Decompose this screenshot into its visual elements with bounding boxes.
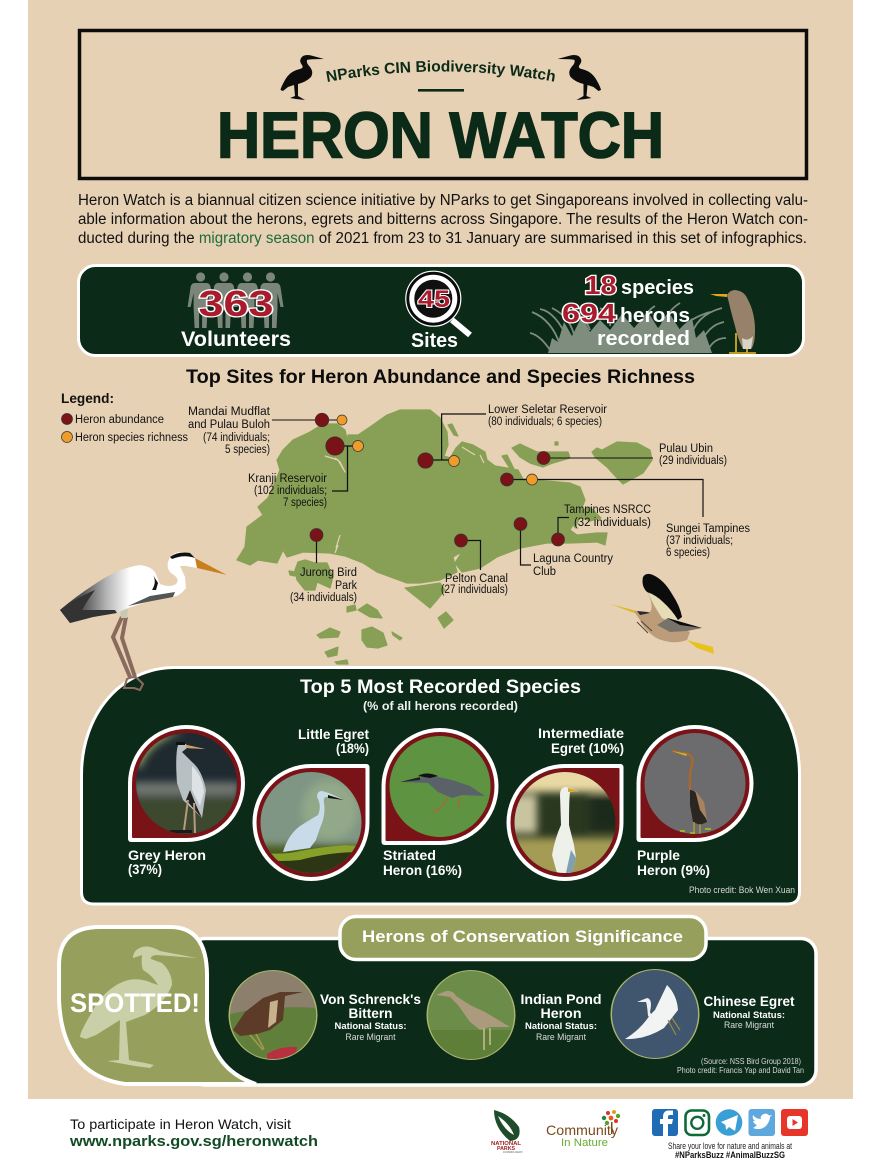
footer call to action: To participate in Heron Watch, visit [70, 1116, 291, 1132]
map site: Laguna Country Club: Laguna Country [533, 553, 613, 565]
footer call to action [69, 1116, 318, 1150]
logo: National Parks [491, 1110, 523, 1154]
label: little egret: (18%) [336, 741, 369, 756]
volunteers number: 363 [198, 283, 274, 324]
icon: youtube [781, 1109, 808, 1136]
label: grey heron: Grey Heron [128, 848, 206, 863]
herons recorded label: herons [620, 305, 690, 327]
map site: Pulau Ubin [537, 443, 727, 467]
intro text: able information about the herons, egrets and bitterns across Singapore. The results of the Heron Watch con- [78, 211, 808, 228]
island: Jurong [295, 560, 333, 590]
photo: striated heron [382, 728, 498, 845]
label: Chinese egret: Chinese Egret [704, 993, 795, 1009]
island: Sentosa area [405, 583, 445, 608]
map site: Mandai Mudflat and Pulau Buloh: 5 species) [225, 444, 270, 456]
map site: Kranji Reservoir [248, 437, 364, 509]
map site: Mandai Mudflat and Pulau Buloh: Mandai Mudflat [188, 406, 271, 418]
label: Indian pond heron: National Status: [525, 1021, 597, 1032]
label: striated heron: Striated [383, 848, 436, 863]
title box [78, 28, 808, 180]
map of Singapore [237, 410, 652, 664]
label: Indian pond heron: Heron [540, 1005, 582, 1021]
panel: stats band [78, 266, 804, 356]
label: Von Schrenck's bittern: Rare Migrant [346, 1032, 396, 1043]
label: Von Schrenck's bittern: Bittern [348, 1005, 392, 1021]
herons recorded label [597, 305, 690, 350]
map site: Lower Seletar Reservoir: Lower Seletar Reservoir [488, 404, 607, 416]
photo: little egret [252, 764, 370, 881]
social caption: #NParksBuzz #AnimalBuzzSG [675, 1150, 785, 1160]
map site: Jurong Bird Park: (34 individuals) [290, 592, 357, 604]
herons number: 694 [562, 298, 617, 328]
map site: Sungei Tampines: Sungei Tampines [666, 523, 750, 535]
panel subheading: (% of all herons recorded) [363, 699, 518, 713]
map site: Kranji Reservoir: Kranji Reservoir [248, 473, 327, 485]
photo: Indian pond heron [426, 970, 516, 1060]
panel heading: Top 5 Most Recorded Species [300, 677, 581, 698]
logo: Community in Nature [546, 1110, 620, 1149]
footer call to action: www.nparks.gov.sg/heronwatch [69, 1133, 318, 1150]
icon: instagram [686, 1110, 709, 1135]
map site: Tampines NSRCC: Tampines NSRCC [564, 504, 651, 516]
island: Pulau Ubin [512, 444, 570, 467]
map site: Kranji Reservoir: 7 species) [283, 497, 327, 509]
logo: Community in Nature: In Nature [561, 1137, 608, 1149]
label: Chinese egret [704, 993, 795, 1031]
label: striated heron [383, 848, 462, 878]
grass illustration [530, 303, 726, 353]
intro text: Heron Watch is a biannual citizen science initiative by NParks to get Singaporeans involved in collecting valu- [78, 192, 808, 209]
map site: Jurong Bird Park [290, 528, 357, 604]
herons recorded label: recorded [597, 328, 690, 350]
illustration: grey heron [60, 552, 227, 690]
curved subtitle: NParks CIN Biodiversity Watch [326, 60, 555, 82]
map site: Mandai Mudflat and Pulau Buloh [188, 406, 347, 456]
panel: top 5 species [82, 668, 800, 904]
legend: Legend: [61, 391, 114, 406]
species label: species [621, 277, 694, 299]
spotted text: SPOTTED! [70, 988, 200, 1018]
icon: magnifier [406, 271, 470, 335]
map heading: Top Sites for Heron Abundance and Species Richness [186, 367, 695, 388]
photo: grey heron [128, 725, 245, 842]
map site: Lower Seletar Reservoir [418, 404, 607, 468]
photo: Von Schrenck's bittern [228, 970, 320, 1062]
map site: Sungei Tampines: (37 individuals; [666, 535, 733, 547]
label: Chinese egret: National Status: [713, 1010, 785, 1021]
logo: National Parks: NATIONAL [491, 1141, 522, 1147]
label: grey heron: (37%) [128, 862, 162, 877]
label: Von Schrenck's bittern [320, 991, 421, 1043]
photo credit: Photo credit: Bok Wen Xuan [689, 885, 795, 895]
icon: twitter [748, 1109, 775, 1136]
map site: Pulau Ubin: Pulau Ubin [659, 443, 713, 455]
icon: left heron silhouette [280, 55, 324, 100]
label: Von Schrenck's bittern: Von Schrenck's [320, 991, 421, 1007]
main title: HERON WATCH [217, 98, 664, 172]
photo: Chinese egret [610, 969, 700, 1059]
label: intermediate egret: Egret (10%) [551, 741, 624, 756]
map site: Sungei Tampines: 6 species) [666, 547, 710, 559]
map site: Pelton Canal: (27 individuals) [441, 584, 508, 596]
island: Pulau Tekong [592, 442, 652, 484]
pill heading [340, 916, 706, 960]
map site: Pelton Canal: Pelton Canal [445, 573, 508, 585]
icon: right heron silhouette [558, 55, 601, 100]
photo: purple heron [636, 725, 754, 842]
icon: heron silhouette [80, 946, 197, 1068]
label: striated heron: Heron (16%) [383, 863, 462, 878]
volunteers label: Volunteers [181, 328, 291, 351]
photo: intermediate egret [505, 760, 630, 881]
southern islands [317, 424, 601, 664]
badge: spotted [59, 927, 256, 1084]
icon: volunteers group [188, 272, 284, 328]
map site: Mandai Mudflat and Pulau Buloh: (74 individuals; [203, 432, 270, 444]
label: Indian pond heron: Indian Pond [520, 991, 602, 1007]
panel: conservation significance [190, 938, 816, 1085]
map site: Jurong Bird Park: Jurong Bird [300, 567, 357, 579]
label: grey heron [128, 848, 206, 877]
label: purple heron: Purple [637, 848, 680, 863]
map site: Laguna Country Club: Club [533, 566, 556, 578]
sites label: Sites [411, 330, 458, 352]
species number: 18 [584, 270, 616, 300]
intro text: ducted during the migratory season of 2021 from 23 to 31 January are summarised in this set of infographics. [78, 230, 807, 247]
intro text [78, 192, 808, 247]
label: little egret: Little Egret [298, 727, 369, 742]
source and credit [677, 1056, 804, 1075]
logo: National Parks: PARKS [497, 1146, 515, 1152]
social caption: Share your love for nature and animals at [668, 1141, 792, 1151]
social caption [668, 1141, 792, 1160]
legend: Heron species richness [75, 432, 188, 444]
map site: Jurong Bird Park: Park [335, 580, 357, 592]
label: Chinese egret: Rare Migrant [724, 1020, 774, 1031]
logo: National Parks: AN NPARKS AGENCY [503, 1150, 523, 1154]
illustration: flying bittern [610, 574, 714, 654]
logo: Community in Nature: Community [546, 1122, 618, 1138]
map site: Mandai Mudflat and Pulau Buloh: and Pulau Buloh [188, 419, 270, 431]
map site: Pulau Ubin: (29 individuals) [659, 455, 727, 467]
label: intermediate egret [538, 726, 625, 756]
label: Von Schrenck's bittern: National Status: [334, 1021, 406, 1032]
sites number: 45 [418, 286, 450, 313]
icon: facebook [652, 1109, 678, 1136]
label: Indian pond heron [520, 991, 602, 1043]
pill heading: Herons of Conservation Significance [362, 927, 683, 946]
map site: Kranji Reservoir: (102 individuals; [254, 485, 327, 497]
map site: Sungei Tampines [500, 473, 750, 559]
icon: pond heron [710, 290, 756, 353]
map site: Tampines NSRCC [552, 504, 651, 546]
legend [61, 391, 188, 444]
icon: telegram [716, 1109, 742, 1136]
label: purple heron: Heron (9%) [637, 863, 710, 878]
label: purple heron [637, 848, 710, 878]
map site: Lower Seletar Reservoir: (80 individuals; 6 species) [488, 416, 602, 428]
label: intermediate egret: Intermediate [538, 726, 625, 741]
map site: Laguna Country Club [514, 518, 613, 578]
legend: Heron abundance [75, 414, 164, 426]
map site: Tampines NSRCC: (32 individuals) [574, 517, 651, 529]
source and credit: Photo credit: Francis Yap and David Tan [677, 1065, 804, 1075]
map site: Pelton Canal [441, 534, 508, 596]
map inlets [325, 447, 484, 553]
source and credit: (Source: NSS Bird Group 2018) [701, 1056, 801, 1066]
label: little egret [298, 727, 369, 756]
label: Indian pond heron: Rare Migrant [536, 1032, 586, 1043]
